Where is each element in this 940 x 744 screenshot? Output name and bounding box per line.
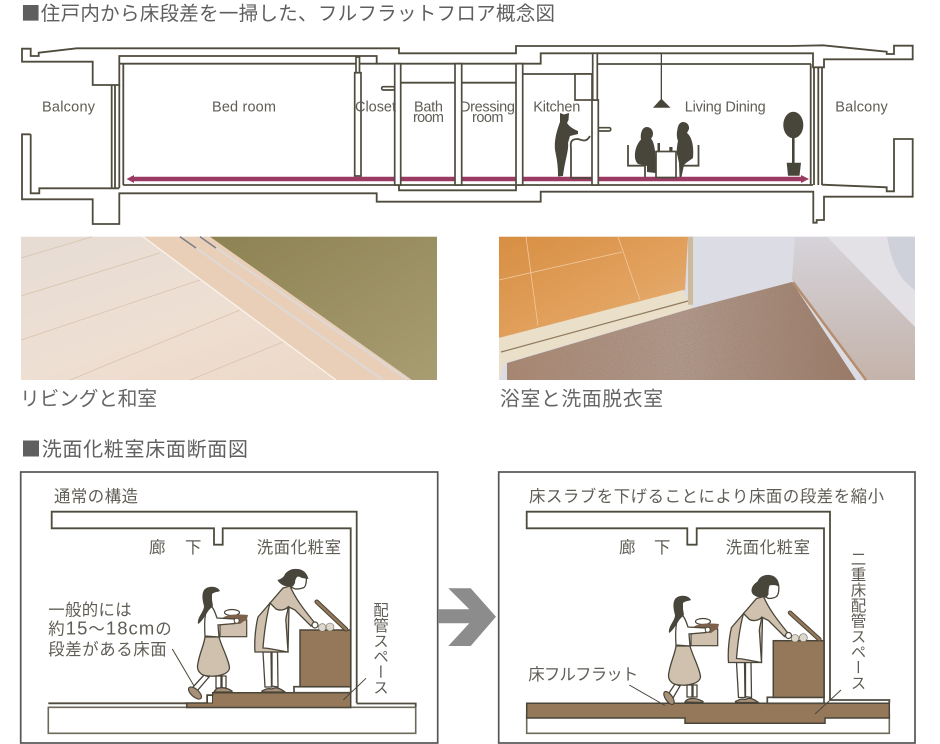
- label: step note: [48, 602, 172, 659]
- floor slab: [48, 707, 416, 733]
- label: step note: 段差がある床面: [48, 641, 167, 659]
- room labels: Bed room: [212, 100, 276, 116]
- room labels: room: [472, 110, 504, 126]
- washing machine: [767, 613, 824, 703]
- room labels: Balcony: [42, 100, 96, 116]
- label: washroom: 洗面化粧室: [257, 539, 341, 557]
- icon: kitchen counter and cook: [555, 113, 592, 178]
- label: corridor 2: 下: [185, 539, 201, 557]
- room labels: room: [413, 110, 444, 126]
- icon: pendant lamp: [653, 54, 670, 108]
- figure: girl with laundry: [187, 587, 248, 701]
- floor line: [123, 184, 813, 186]
- raised brown floor: [187, 693, 351, 708]
- label: step note: 約15～18cmの: [48, 617, 172, 638]
- panel title: 通常の構造: [54, 488, 138, 506]
- right window: [811, 64, 822, 185]
- photo: living and Japanese room floor: [21, 237, 437, 380]
- room labels: Living Dining: [685, 100, 766, 116]
- leader lines: [629, 685, 841, 714]
- caption: living and Japanese room: リビングと和室: [20, 389, 157, 411]
- figure: girl with laundry: [662, 596, 719, 706]
- figure: woman: [255, 569, 318, 692]
- flat brown floor: [527, 703, 889, 723]
- washing machine: [294, 602, 351, 693]
- heading: washroom floor section: ■洗面化粧室床面断面図: [21, 433, 248, 462]
- room labels: Dressing: [460, 100, 515, 116]
- label: corridor 2: 下: [654, 539, 670, 557]
- panel: conventional structure: [21, 472, 438, 743]
- label: corridor: 廊: [149, 539, 165, 557]
- arrow: improvement direction: [438, 588, 496, 646]
- ceiling slab and wall: [52, 512, 357, 703]
- label: corridor: 廊: [619, 539, 635, 557]
- room labels: Kitchen: [533, 100, 580, 116]
- photo: bathroom and washroom floor: [499, 237, 915, 382]
- figure: woman: [728, 575, 792, 702]
- caption: bath and washroom: 浴室と洗面脱衣室: [500, 389, 663, 411]
- full-flat arrow: [126, 175, 809, 183]
- label: piping space: 配管スペース: [371, 602, 389, 695]
- label: washroom: 洗面化粧室: [726, 539, 810, 557]
- room labels: Balcony: [835, 100, 889, 116]
- label: double floor piping space: 二重床配管スペース: [848, 551, 866, 690]
- ceiling slab and wall: [527, 512, 830, 700]
- panel: lowered slab structure: [499, 472, 915, 743]
- left window: [112, 64, 123, 188]
- ceiling lines: [119, 64, 811, 83]
- floor slab: [527, 715, 889, 733]
- icon: potted plant: [783, 112, 803, 176]
- interior walls: [355, 53, 611, 185]
- panel frame: [499, 472, 915, 743]
- room labels: Bath: [414, 100, 443, 116]
- room labels: Closet: [355, 100, 396, 116]
- lower slab outline: [22, 134, 913, 224]
- room labels: [42, 100, 889, 126]
- label: step note: 一般的には: [48, 602, 132, 620]
- label: flat floor: 床フルフラット: [528, 666, 638, 684]
- panel title: 床スラブを下げることにより床面の段差を縮小: [529, 487, 884, 506]
- leader lines: [172, 649, 366, 700]
- upper slab outline: [22, 45, 913, 85]
- icon: dining figures and table: [628, 122, 698, 178]
- panel frame: [21, 472, 438, 743]
- section diagram: apartment cross-section: [22, 45, 913, 224]
